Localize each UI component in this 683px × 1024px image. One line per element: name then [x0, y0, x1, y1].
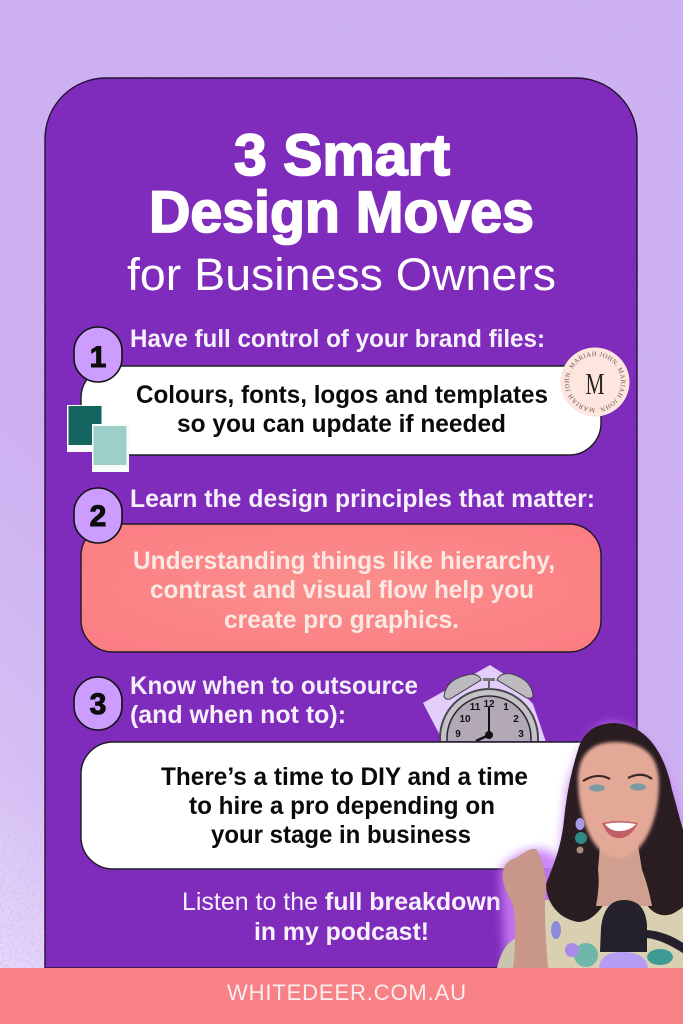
card 1 text [136, 381, 548, 438]
card 3 text [161, 763, 528, 849]
title: Design Moves [149, 180, 534, 245]
title: 3 Smart [234, 123, 450, 188]
card 3 text: your stage in business [211, 821, 471, 849]
card 3 text: There’s a time to DIY and a time [161, 763, 528, 791]
card 2 text: Understanding things like hierarchy, [133, 547, 555, 575]
icon: alarm clock: 9 [455, 729, 461, 740]
icon: colour swatches [67, 405, 129, 472]
panel: main purple card [45, 78, 637, 968]
sweater flowers [551, 921, 673, 967]
card 2 text: create pro graphics. [224, 606, 459, 634]
number badge 2: 2 [90, 500, 106, 533]
heading 3 [130, 672, 418, 729]
icon: alarm clock: 10 [459, 714, 471, 725]
microphone [599, 900, 683, 968]
icon: alarm clock: 11 [470, 702, 481, 713]
icon: round logo stamp: M [586, 366, 604, 401]
title [127, 123, 556, 300]
card 1 text: so you can update if needed [177, 410, 506, 438]
neck and chest [596, 845, 652, 906]
heading 1: Have full control of your brand files: [130, 325, 545, 353]
sleeve [497, 938, 516, 968]
card 3 [81, 742, 621, 869]
number badge 3 [74, 677, 122, 730]
heading 3: Know when to outsource [130, 672, 418, 700]
icon: alarm clock [423, 665, 546, 741]
glow around presenter [500, 723, 683, 968]
earring [575, 818, 587, 854]
title: for Business Owners [127, 249, 556, 300]
sweater [534, 900, 683, 968]
section 3: outsourcing [74, 665, 621, 869]
number badge 3: 3 [90, 688, 106, 721]
call to action text: in my podcast! [254, 918, 429, 946]
number badge 1 [74, 327, 122, 382]
heading 3: (and when not to): [130, 701, 346, 729]
footer band [0, 968, 683, 1024]
face [578, 742, 659, 858]
icon: round logo stamp: MARIAH JOHN. MARIAH JOHN. MARIAH JOHN. [564, 352, 626, 412]
card 1 [81, 366, 601, 455]
number badge 2 [74, 488, 122, 543]
call to action text: Listen to the full breakdown [182, 888, 501, 916]
raised hand and arm [503, 849, 548, 968]
section 1: brand files [67, 325, 630, 472]
call to action text [182, 888, 501, 946]
card 2 [81, 524, 601, 652]
card 2 text: contrast and visual flow help you [150, 576, 534, 604]
website address: WHITEDEER.COM.AU [227, 980, 466, 1005]
smile [602, 821, 638, 838]
section 2: design principles [74, 485, 601, 652]
card 2 text [133, 547, 555, 634]
icon: alarm clock: 2 [513, 714, 519, 725]
presenter photo illustration [497, 723, 683, 968]
icon: alarm clock: 12 [483, 699, 495, 710]
card 3 text: to hire a pro depending on [189, 792, 495, 820]
heading 2: Learn the design principles that matter: [130, 485, 595, 513]
card 1 text: Colours, fonts, logos and templates [136, 381, 548, 409]
icon: alarm clock: 3 [518, 729, 524, 740]
eyes and brows [583, 775, 652, 792]
hair [546, 723, 683, 922]
icon: alarm clock: 1 [503, 702, 509, 713]
number badge 1: 1 [90, 341, 106, 374]
